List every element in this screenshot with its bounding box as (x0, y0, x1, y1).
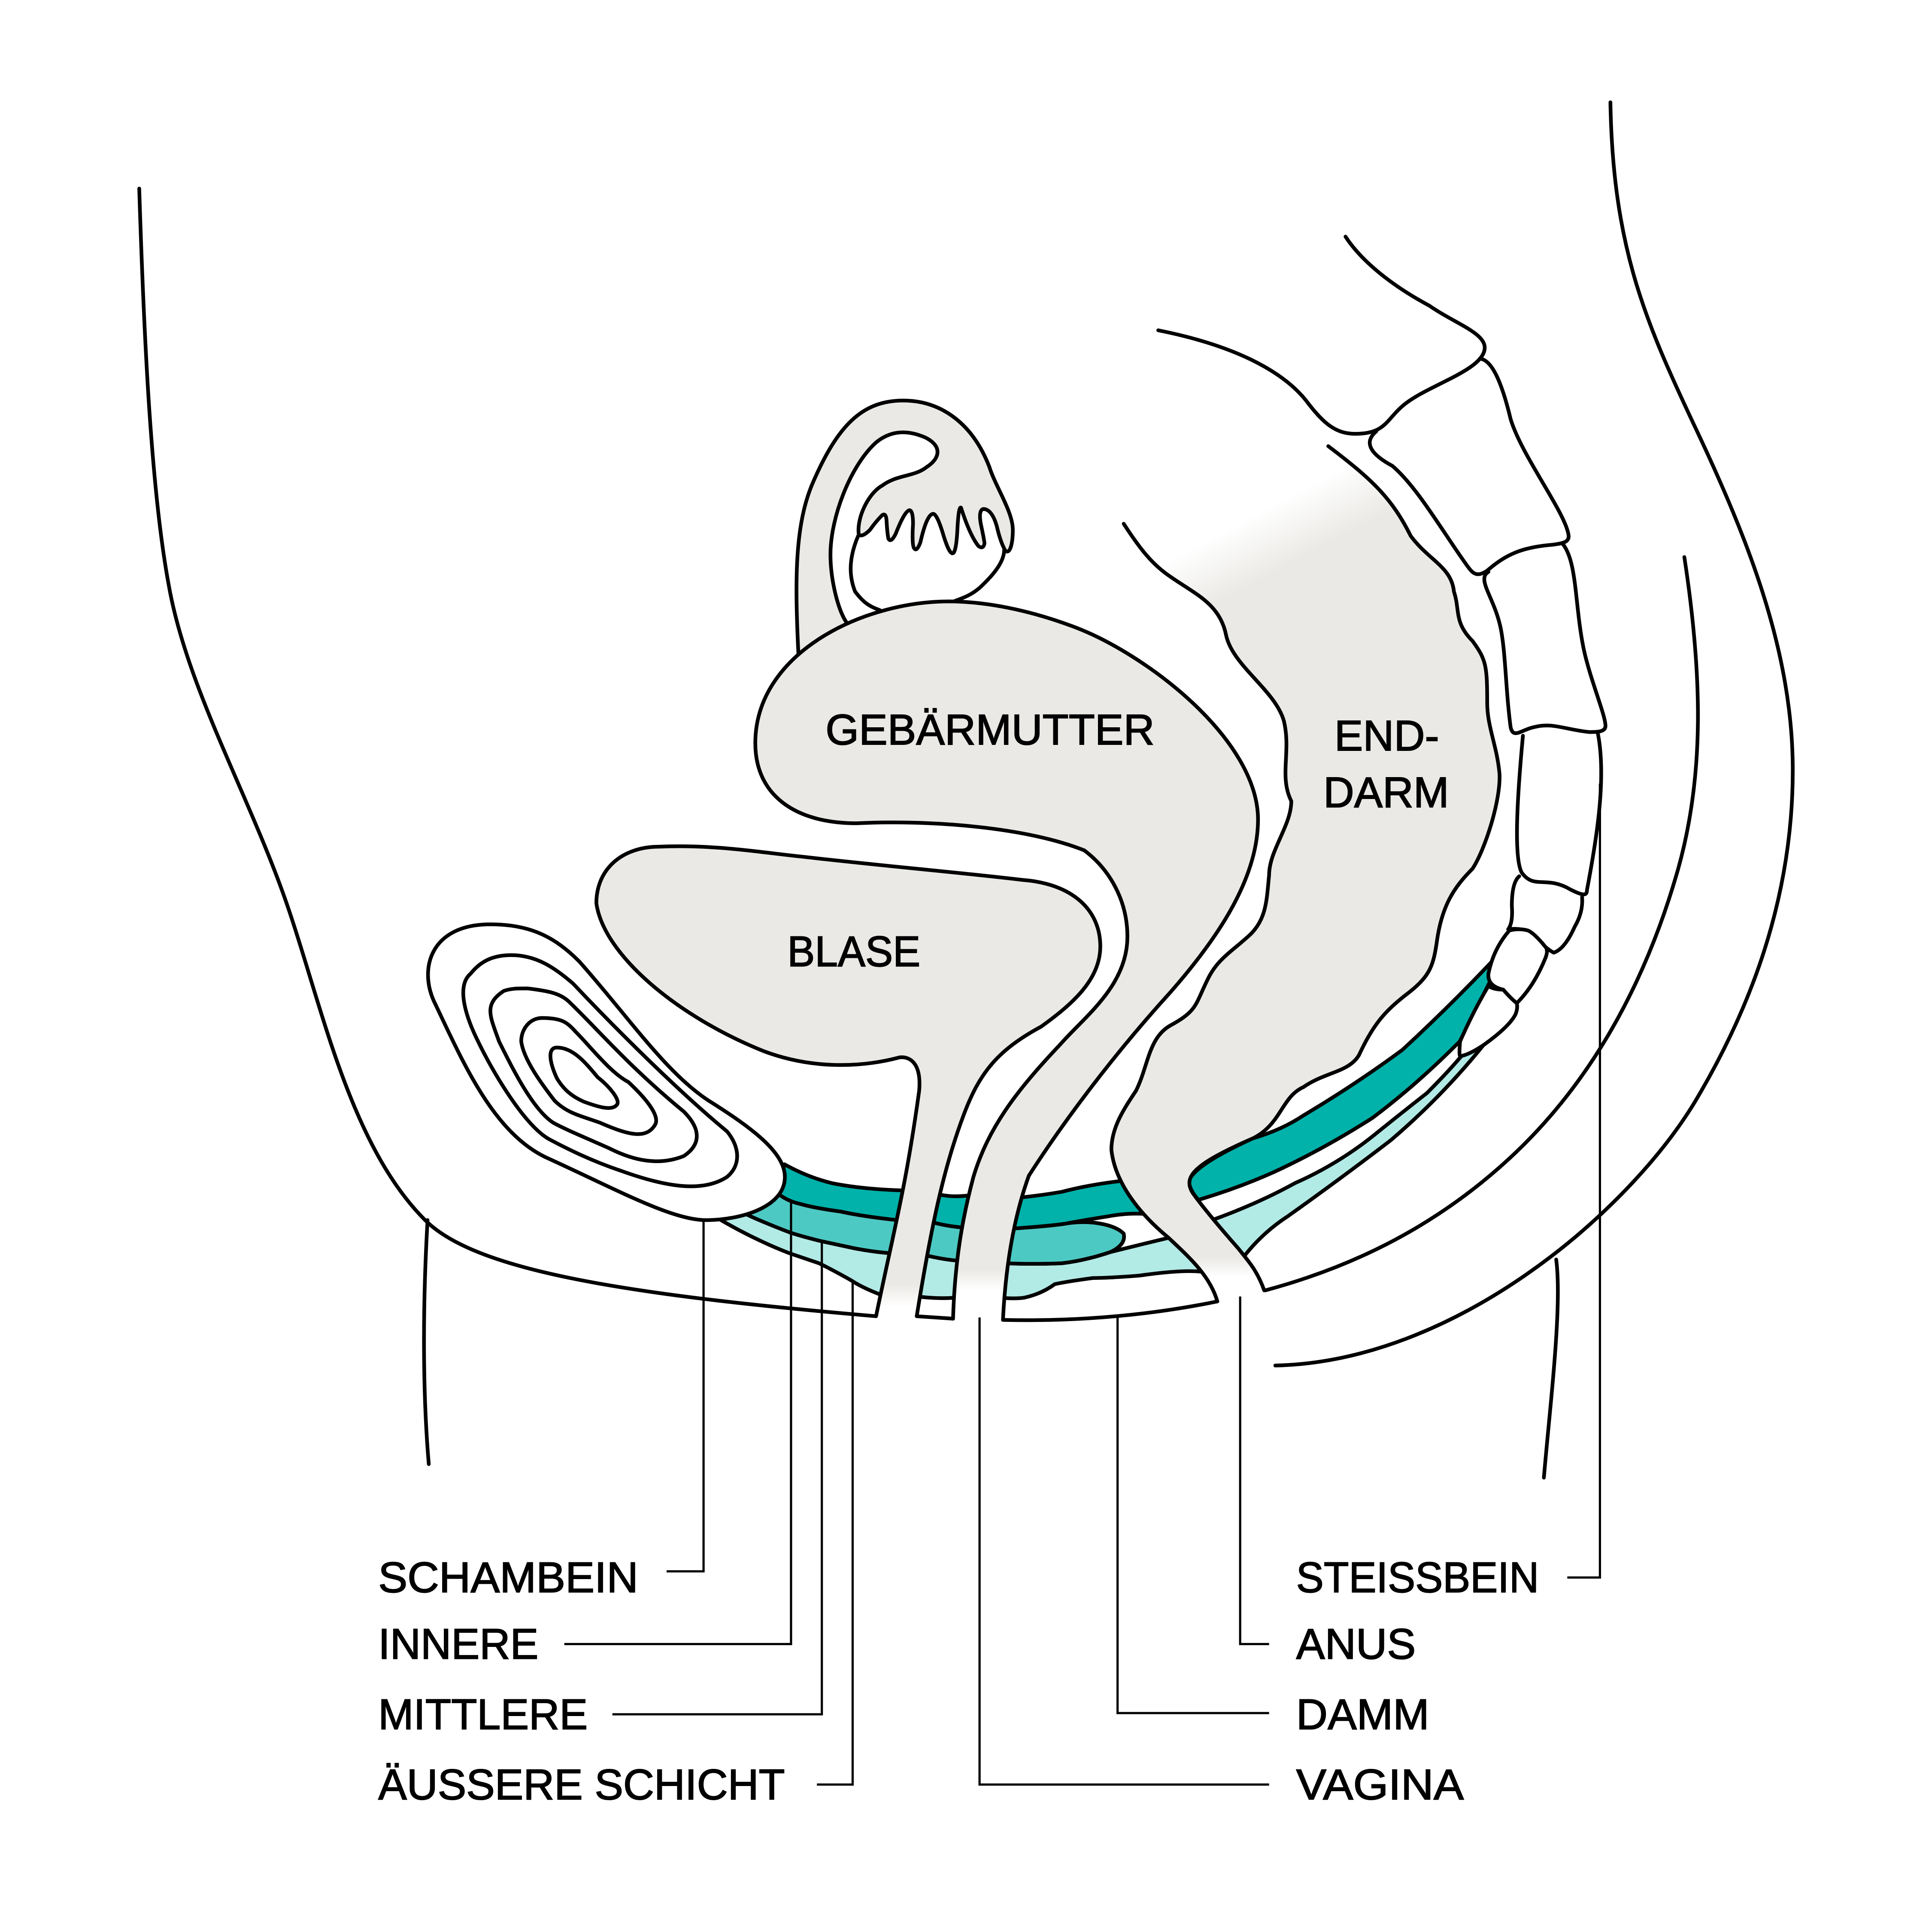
leader: Äussere Schicht (817, 1280, 852, 1785)
organ labels (787, 706, 1449, 976)
leader: Anus (1240, 1297, 1269, 1644)
pubic bone ring 2 (463, 955, 737, 1186)
middle layer: front section (746, 1194, 899, 1253)
pubic bone outer contour (428, 924, 785, 1220)
inner layer: front section (779, 1164, 904, 1220)
outer layer: between vagina and anus (1001, 1237, 1203, 1298)
buttock line (1265, 557, 1698, 1290)
vertebra 1 (1370, 358, 1569, 574)
label: End-: END- (1335, 712, 1439, 760)
rectum back wall (1189, 446, 1500, 1290)
bladder and urethra (596, 846, 1100, 1316)
sacrum and coccyx (1158, 237, 1605, 1056)
urethra base line (917, 1316, 953, 1318)
fallopian tube with fimbriae (797, 401, 1013, 654)
label: Schambein: SCHAMBEIN (378, 1554, 638, 1602)
leader: Mittlere (613, 1242, 822, 1714)
callout labels right (1296, 1554, 1539, 1809)
callout labels left (378, 1554, 785, 1809)
leader: Steissbein (1567, 784, 1600, 1577)
upper sacrum line (1158, 237, 1485, 434)
body outline (139, 102, 1793, 1478)
outer layer: behind anus (1212, 1045, 1483, 1256)
pubic bone ring 5 (550, 1048, 618, 1108)
label: Gebärmutter: GEBÄRMUTTER (825, 706, 1155, 754)
uterus and vagina (755, 601, 1258, 1320)
right thigh line (1544, 1260, 1558, 1478)
pelvic floor muscle layers (715, 960, 1493, 1298)
back of body (1275, 102, 1793, 1366)
vertebra 2 (1484, 544, 1605, 733)
outer layer: between urethra and vagina (918, 1255, 958, 1298)
label: Mittlere: MITTLERE (378, 1690, 588, 1738)
fallopian tube and ovary (797, 401, 1013, 654)
label: Innere: INNERE (378, 1620, 538, 1668)
inner layer: between vagina and anus (1010, 1181, 1145, 1229)
ovary outline (851, 536, 1004, 610)
leader: Schambein (667, 1220, 704, 1571)
inner layer: behind anus (1189, 960, 1493, 1200)
label: Steissbein: STEISSBEIN (1296, 1554, 1539, 1602)
rectum and anal canal (1111, 446, 1500, 1301)
leader: Innere (564, 1203, 791, 1644)
leader: Damm (1118, 1318, 1269, 1713)
anal canal fade (1184, 1253, 1264, 1301)
label: Blase: BLASE (787, 928, 920, 976)
rectum front wall (1111, 524, 1291, 1301)
label: Äussere Schicht: ÄUSSERE SCHICHT (378, 1761, 785, 1809)
left thigh line (424, 1220, 429, 1464)
perineum base line (1003, 1301, 1217, 1320)
vertebra 3 (1517, 732, 1601, 894)
middle layer: between vagina and anus (1004, 1222, 1124, 1264)
pubic bone ring 4 (521, 1018, 656, 1134)
label: Damm: DAMM (1296, 1690, 1429, 1738)
rectum fill (1111, 446, 1500, 1301)
front of body (139, 188, 876, 1316)
vertebra 4 (1508, 876, 1582, 953)
vertebra 5 (1488, 929, 1547, 1003)
pubic bone (428, 924, 785, 1220)
label: Darm: DARM (1323, 769, 1449, 817)
leader: Vagina (980, 1318, 1269, 1785)
label: Vagina: VAGINA (1296, 1761, 1464, 1809)
middle layer: between urethra and vagina (923, 1221, 964, 1261)
pubic bone ring 3 (490, 988, 697, 1161)
inner layer: between urethra and vagina (929, 1193, 968, 1227)
coccyx tip (1459, 986, 1517, 1056)
label: Anus: ANUS (1296, 1620, 1416, 1668)
leader lines (564, 784, 1600, 1785)
outer layer: front section (715, 1214, 892, 1295)
